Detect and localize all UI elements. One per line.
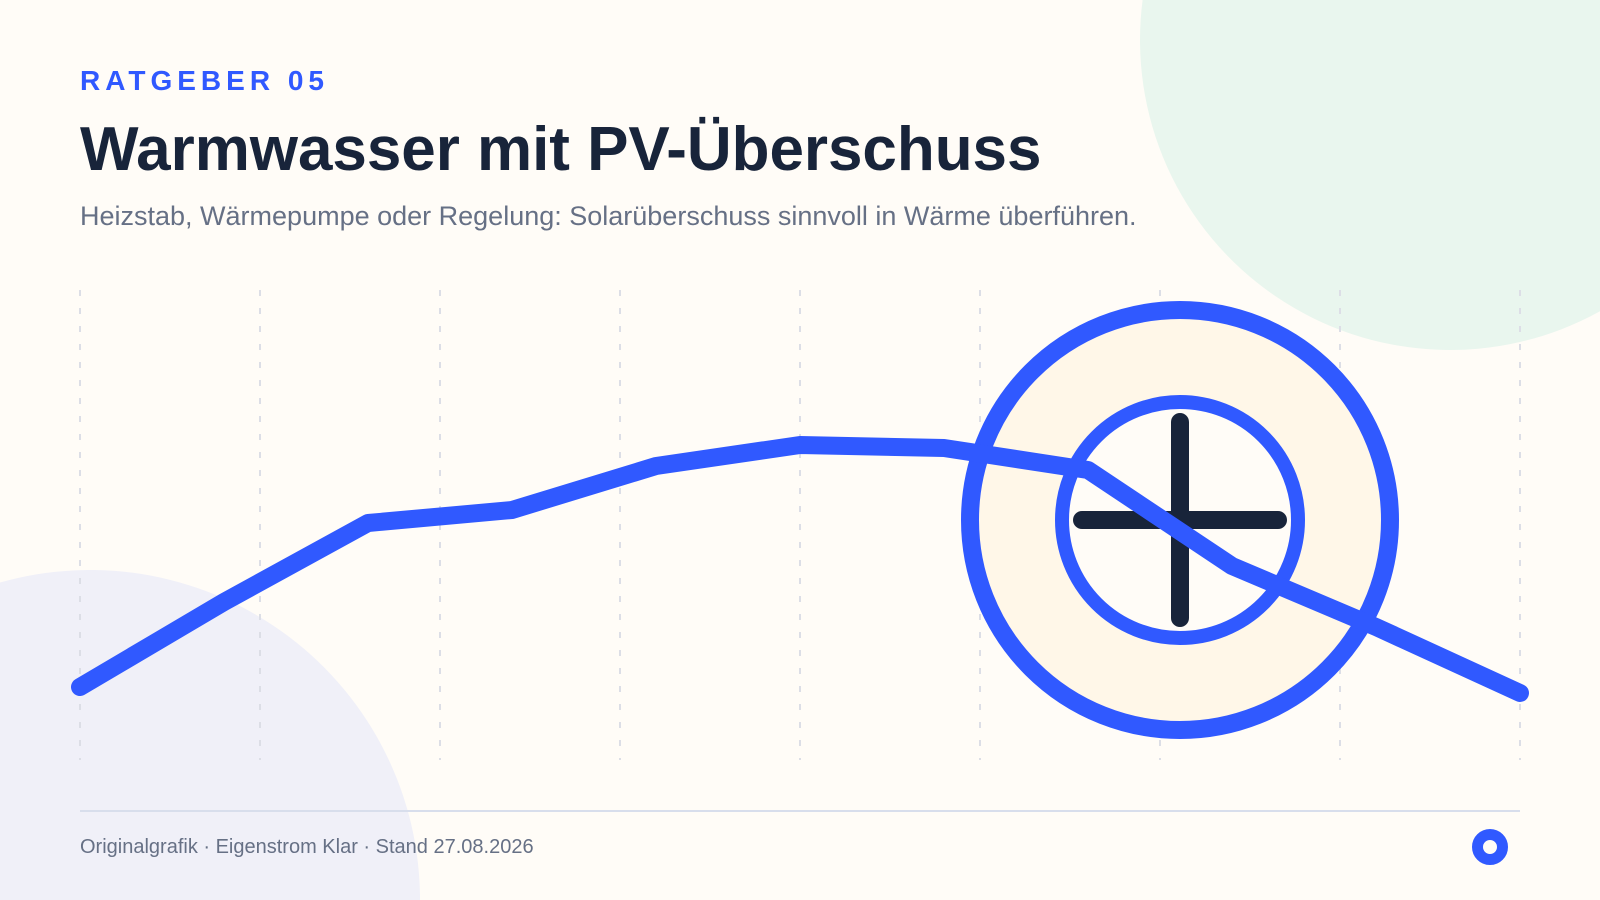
inner ring [1062, 402, 1298, 638]
title: Warmwasser mit PV-Überschuss [80, 115, 1041, 184]
icon: target with heating cross [970, 310, 1390, 730]
footer rule [80, 810, 1520, 812]
cross [1082, 422, 1278, 618]
eyebrow label: RATGEBER 05 [80, 65, 329, 96]
background circle: lavender bottom left [0, 570, 420, 900]
icon: footer logo [1478, 834, 1502, 860]
outer ring [970, 310, 1390, 730]
line chart: surplus curve [80, 445, 1520, 693]
background circle: green top right [1140, 0, 1600, 350]
subtitle: Heizstab, Wärmepumpe oder Regelung: Solarüberschuss sinnvoll in Wärme überführen. [80, 201, 1137, 231]
footer text: Originalgrafik · Eigenstrom Klar · Stand 27.08.2026 [80, 836, 534, 858]
